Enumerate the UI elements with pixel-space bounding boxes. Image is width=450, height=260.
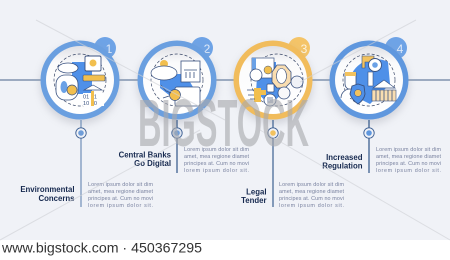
body 3: principes at. Cum no movi: [279, 196, 344, 202]
heading 1: Environmental: [20, 185, 74, 194]
badge 1: [94, 37, 116, 59]
heading 4: Increased: [326, 153, 363, 162]
body 2: [184, 147, 250, 174]
body 4: lorem ipsum dolor sit.: [376, 168, 441, 174]
body 1: principes at. Cum no movi: [88, 196, 153, 202]
heading 4: Regulation: [322, 162, 363, 170]
body 3: lorem ipsum dolor sit.: [279, 203, 344, 209]
heading 2: [119, 150, 172, 168]
icon: environment: 01 01: [83, 94, 97, 100]
body 3: amet, mea regione diamet: [279, 189, 344, 195]
connector 1: [76, 120, 86, 207]
body 1: amet, mea regione diamet: [88, 189, 154, 195]
body 1: lorem ipsum dolor sit.: [88, 203, 153, 209]
heading 2: Go Digital: [134, 159, 171, 168]
heading 3: [241, 188, 266, 205]
badge 1: 1: [106, 42, 113, 56]
heading 4: [322, 153, 363, 170]
body 4: amet, mea regione diamet: [376, 154, 442, 160]
body 2: Lorem ipsum dolor sit dim: [184, 147, 250, 153]
body 2: amet, mea regione diamet: [184, 154, 250, 160]
connector 4: [364, 120, 374, 173]
body 3: [279, 182, 344, 209]
heading 1: Concerns: [39, 194, 75, 203]
circle 2: [137, 40, 217, 124]
body 2: lorem ipsum dolor sit.: [184, 168, 249, 174]
icon: legal tender: [247, 54, 303, 106]
badge 3: 3: [301, 42, 308, 56]
icon: digital bank: [151, 54, 203, 106]
body 1: Lorem ipsum dolor sit dim: [88, 182, 154, 188]
step 4: [322, 37, 442, 174]
body 4: Lorem ipsum dolor sit dim: [376, 147, 442, 153]
step 2: [119, 37, 250, 174]
icon: environment: 10 10: [83, 101, 97, 107]
step 1: [20, 37, 154, 209]
circle 3: [233, 40, 313, 124]
heading 1: [20, 185, 75, 203]
body 3: Lorem ipsum dolor sit dim: [279, 182, 344, 188]
circle 4: [329, 40, 409, 124]
footer caption: www.bigstock.com · 450367295: [1, 240, 202, 256]
heading 2: Central Banks: [119, 150, 172, 160]
badge 2: 2: [204, 42, 211, 56]
heading 3: Tender: [241, 196, 266, 205]
connector 3: [268, 120, 278, 207]
step 3: [233, 37, 344, 209]
icon: regulation: [341, 54, 396, 106]
body 4: principes at. Cum no movi: [376, 161, 441, 167]
heading 3: Legal: [246, 188, 266, 196]
circle 1: [40, 40, 120, 124]
body 2: principes at. Cum no movi: [184, 161, 249, 167]
badge 3: [288, 37, 310, 59]
icon: environment: [54, 54, 106, 107]
connector 2: [172, 120, 182, 173]
badge 4: 4: [397, 42, 404, 56]
body 1: [88, 182, 154, 209]
body 4: [376, 147, 442, 174]
